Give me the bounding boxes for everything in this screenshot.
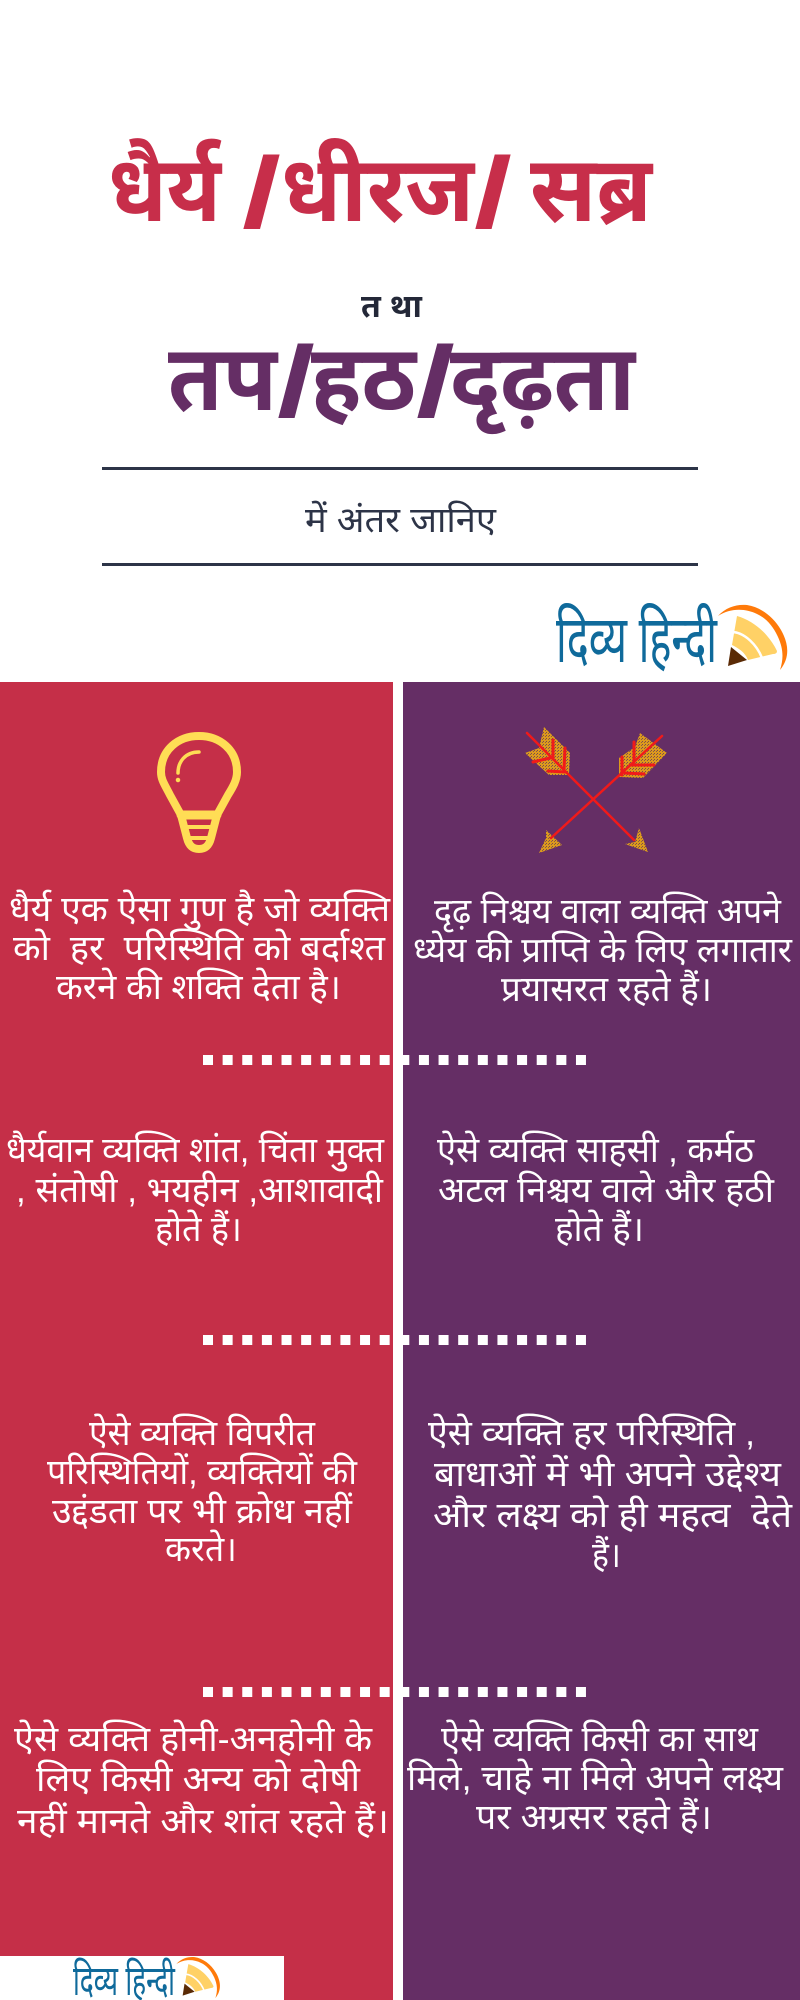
text block: patience point 1: को हर परिस्थिति को बर्दाश्त bbox=[13, 928, 386, 968]
title: patience bbox=[108, 137, 654, 249]
connector word: and: त था bbox=[361, 288, 423, 324]
text block: patience point 2: धैर्यवान व्यक्ति शांत, चिंता मुक्त bbox=[6, 1130, 385, 1171]
text block: perseverance point 2: होते हैं। bbox=[555, 1209, 644, 1249]
text block: patience point 1 bbox=[9, 889, 391, 1007]
text block: patience point 4 bbox=[14, 1719, 389, 1841]
text block: patience point 3: ऐसे व्यक्ति विपरीत bbox=[89, 1413, 316, 1453]
text block: patience point 1: करने की शक्ति देता है। bbox=[56, 967, 341, 1007]
panel: perseverance column bbox=[403, 682, 800, 2000]
text block: perseverance point 3 bbox=[428, 1413, 793, 1575]
text block: perseverance point 1: ध्येय की प्राप्ति के लिए लगातार bbox=[413, 930, 793, 970]
text block: perseverance point 3: और लक्ष्य को ही महत्व देते bbox=[433, 1495, 793, 1535]
title: patience: धीरज bbox=[281, 139, 476, 241]
title: perseverance: दृढ़ता bbox=[450, 328, 637, 435]
text block: patience point 1: धैर्य एक ऐसा गुण है जो व्यक्ति bbox=[9, 889, 391, 930]
text block: perseverance point 2 bbox=[437, 1130, 775, 1249]
text block: patience point 2 bbox=[6, 1130, 385, 1249]
text block: perseverance point 2: अटल निश्चय वाले और हठी bbox=[438, 1170, 775, 1210]
title: perseverance bbox=[168, 326, 637, 438]
text block: perseverance point 3: बाधाओं में भी अपने उद्देश्य bbox=[434, 1454, 782, 1494]
text block: patience point 4: लिए किसी अन्य को दोषी bbox=[36, 1759, 361, 1799]
text block: patience point 3: करते। bbox=[165, 1529, 237, 1569]
text block: patience point 2: , संतोषी , भयहीन ,आशावादी bbox=[16, 1170, 384, 1210]
text block: perseverance point 3: ऐसे व्यक्ति हर परिस्थिति , bbox=[428, 1413, 755, 1453]
title: perseverance: / bbox=[416, 326, 455, 438]
text block: perseverance point 4: ऐसे व्यक्ति किसी का साथ bbox=[441, 1719, 759, 1759]
text block: patience point 4: नहीं मानते और शांत रहते हैं। bbox=[17, 1801, 389, 1841]
text block: perseverance point 3: हैं। bbox=[592, 1535, 621, 1575]
title: patience: सब्र bbox=[530, 139, 654, 241]
divider 2 bbox=[203, 1335, 595, 1345]
text block: perseverance point 4 bbox=[407, 1719, 784, 1837]
title: patience: / bbox=[474, 137, 512, 249]
divider 1 bbox=[203, 1055, 595, 1065]
text block: perseverance point 1: दृढ़ निश्चय वाला व्यक्ति अपने bbox=[434, 891, 782, 933]
subtitle with rules bbox=[102, 467, 698, 566]
divider 3 bbox=[203, 1687, 595, 1697]
icon: light bulb bbox=[161, 736, 237, 849]
text block: patience point 4: ऐसे व्यक्ति होनी-अनहोनी के bbox=[14, 1719, 373, 1759]
panel: patience column bbox=[0, 682, 393, 2000]
text block: patience point 3: उद्दंडता पर भी क्रोध नहीं bbox=[52, 1491, 353, 1531]
logo: bottom bbox=[0, 1956, 284, 2000]
text block: perseverance point 2: ऐसे व्यक्ति साहसी , कर्मठ bbox=[437, 1130, 755, 1170]
icon: crossed arrows bbox=[525, 727, 667, 853]
text block: perseverance point 4: मिले, चाहे ना मिले अपने लक्ष्य bbox=[407, 1758, 784, 1798]
text block: perseverance point 4: पर अग्रसर रहते हैं। bbox=[476, 1797, 712, 1837]
text block: patience point 3: परिस्थितियों, व्यक्तियों की bbox=[47, 1452, 358, 1492]
title: perseverance: हठ bbox=[311, 328, 418, 430]
text block: perseverance point 1: प्रयासरत रहते हैं। bbox=[501, 969, 712, 1009]
title: patience: धैर्य bbox=[108, 138, 222, 241]
text block: perseverance point 1 bbox=[413, 891, 793, 1009]
subtitle with rules: में अंतर जानिए bbox=[305, 500, 497, 540]
text block: patience point 2: होते हैं। bbox=[155, 1209, 242, 1249]
text block: patience point 3 bbox=[47, 1413, 358, 1569]
title: perseverance: / bbox=[277, 326, 315, 438]
title: patience: / bbox=[242, 137, 281, 249]
title: perseverance: तप bbox=[168, 328, 278, 430]
